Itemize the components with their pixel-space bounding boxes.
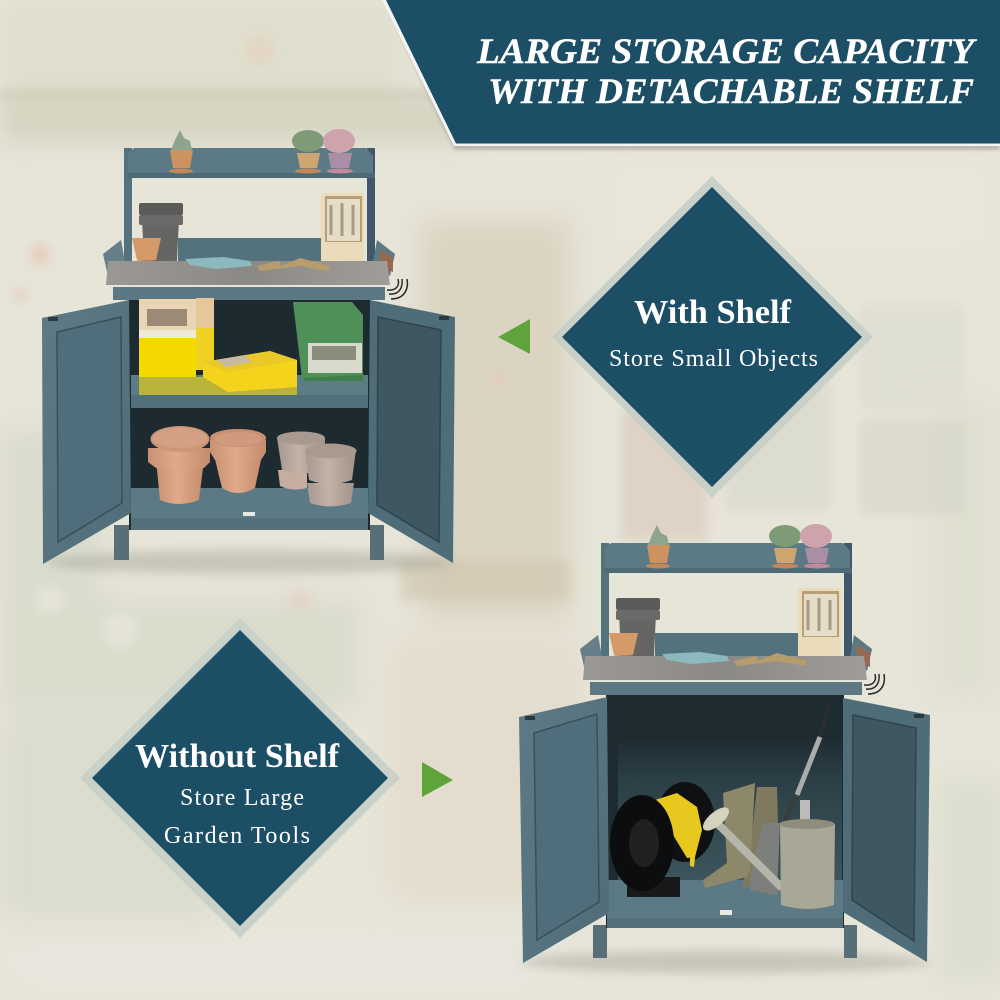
cabinet with shelf (42, 129, 455, 574)
title banner (382, 0, 1000, 149)
right door (843, 698, 930, 962)
diamond: with shelf (552, 176, 873, 498)
heading: LARGE STORAGE CAPACITY (476, 31, 977, 71)
left door (519, 697, 609, 963)
legs (593, 925, 857, 958)
diamond heading: Without Shelf (135, 738, 340, 775)
cabinet interior (606, 695, 844, 928)
diamond heading: With Shelf (634, 294, 792, 331)
terracotta pots (148, 426, 356, 506)
floor shadow (45, 550, 455, 574)
diamond text: Garden Tools (164, 823, 310, 849)
floor shadow (520, 951, 930, 973)
right door (368, 300, 455, 563)
callout arrow: right (422, 762, 453, 797)
cabinet interior (129, 300, 370, 530)
boots and tools (699, 703, 835, 909)
legs (114, 525, 384, 560)
shelf items (139, 298, 363, 392)
left door (42, 300, 131, 564)
diamond text: Store Small Objects (609, 346, 818, 372)
diamond text (164, 785, 310, 849)
diamond text: Store Large (180, 785, 304, 811)
heading: WITH DETACHABLE SHELF (488, 71, 974, 111)
diamond: without shelf (80, 618, 400, 938)
callout arrow: left (498, 319, 530, 354)
hose reel (610, 782, 715, 897)
cabinet without shelf (519, 524, 930, 973)
heading (476, 31, 977, 111)
